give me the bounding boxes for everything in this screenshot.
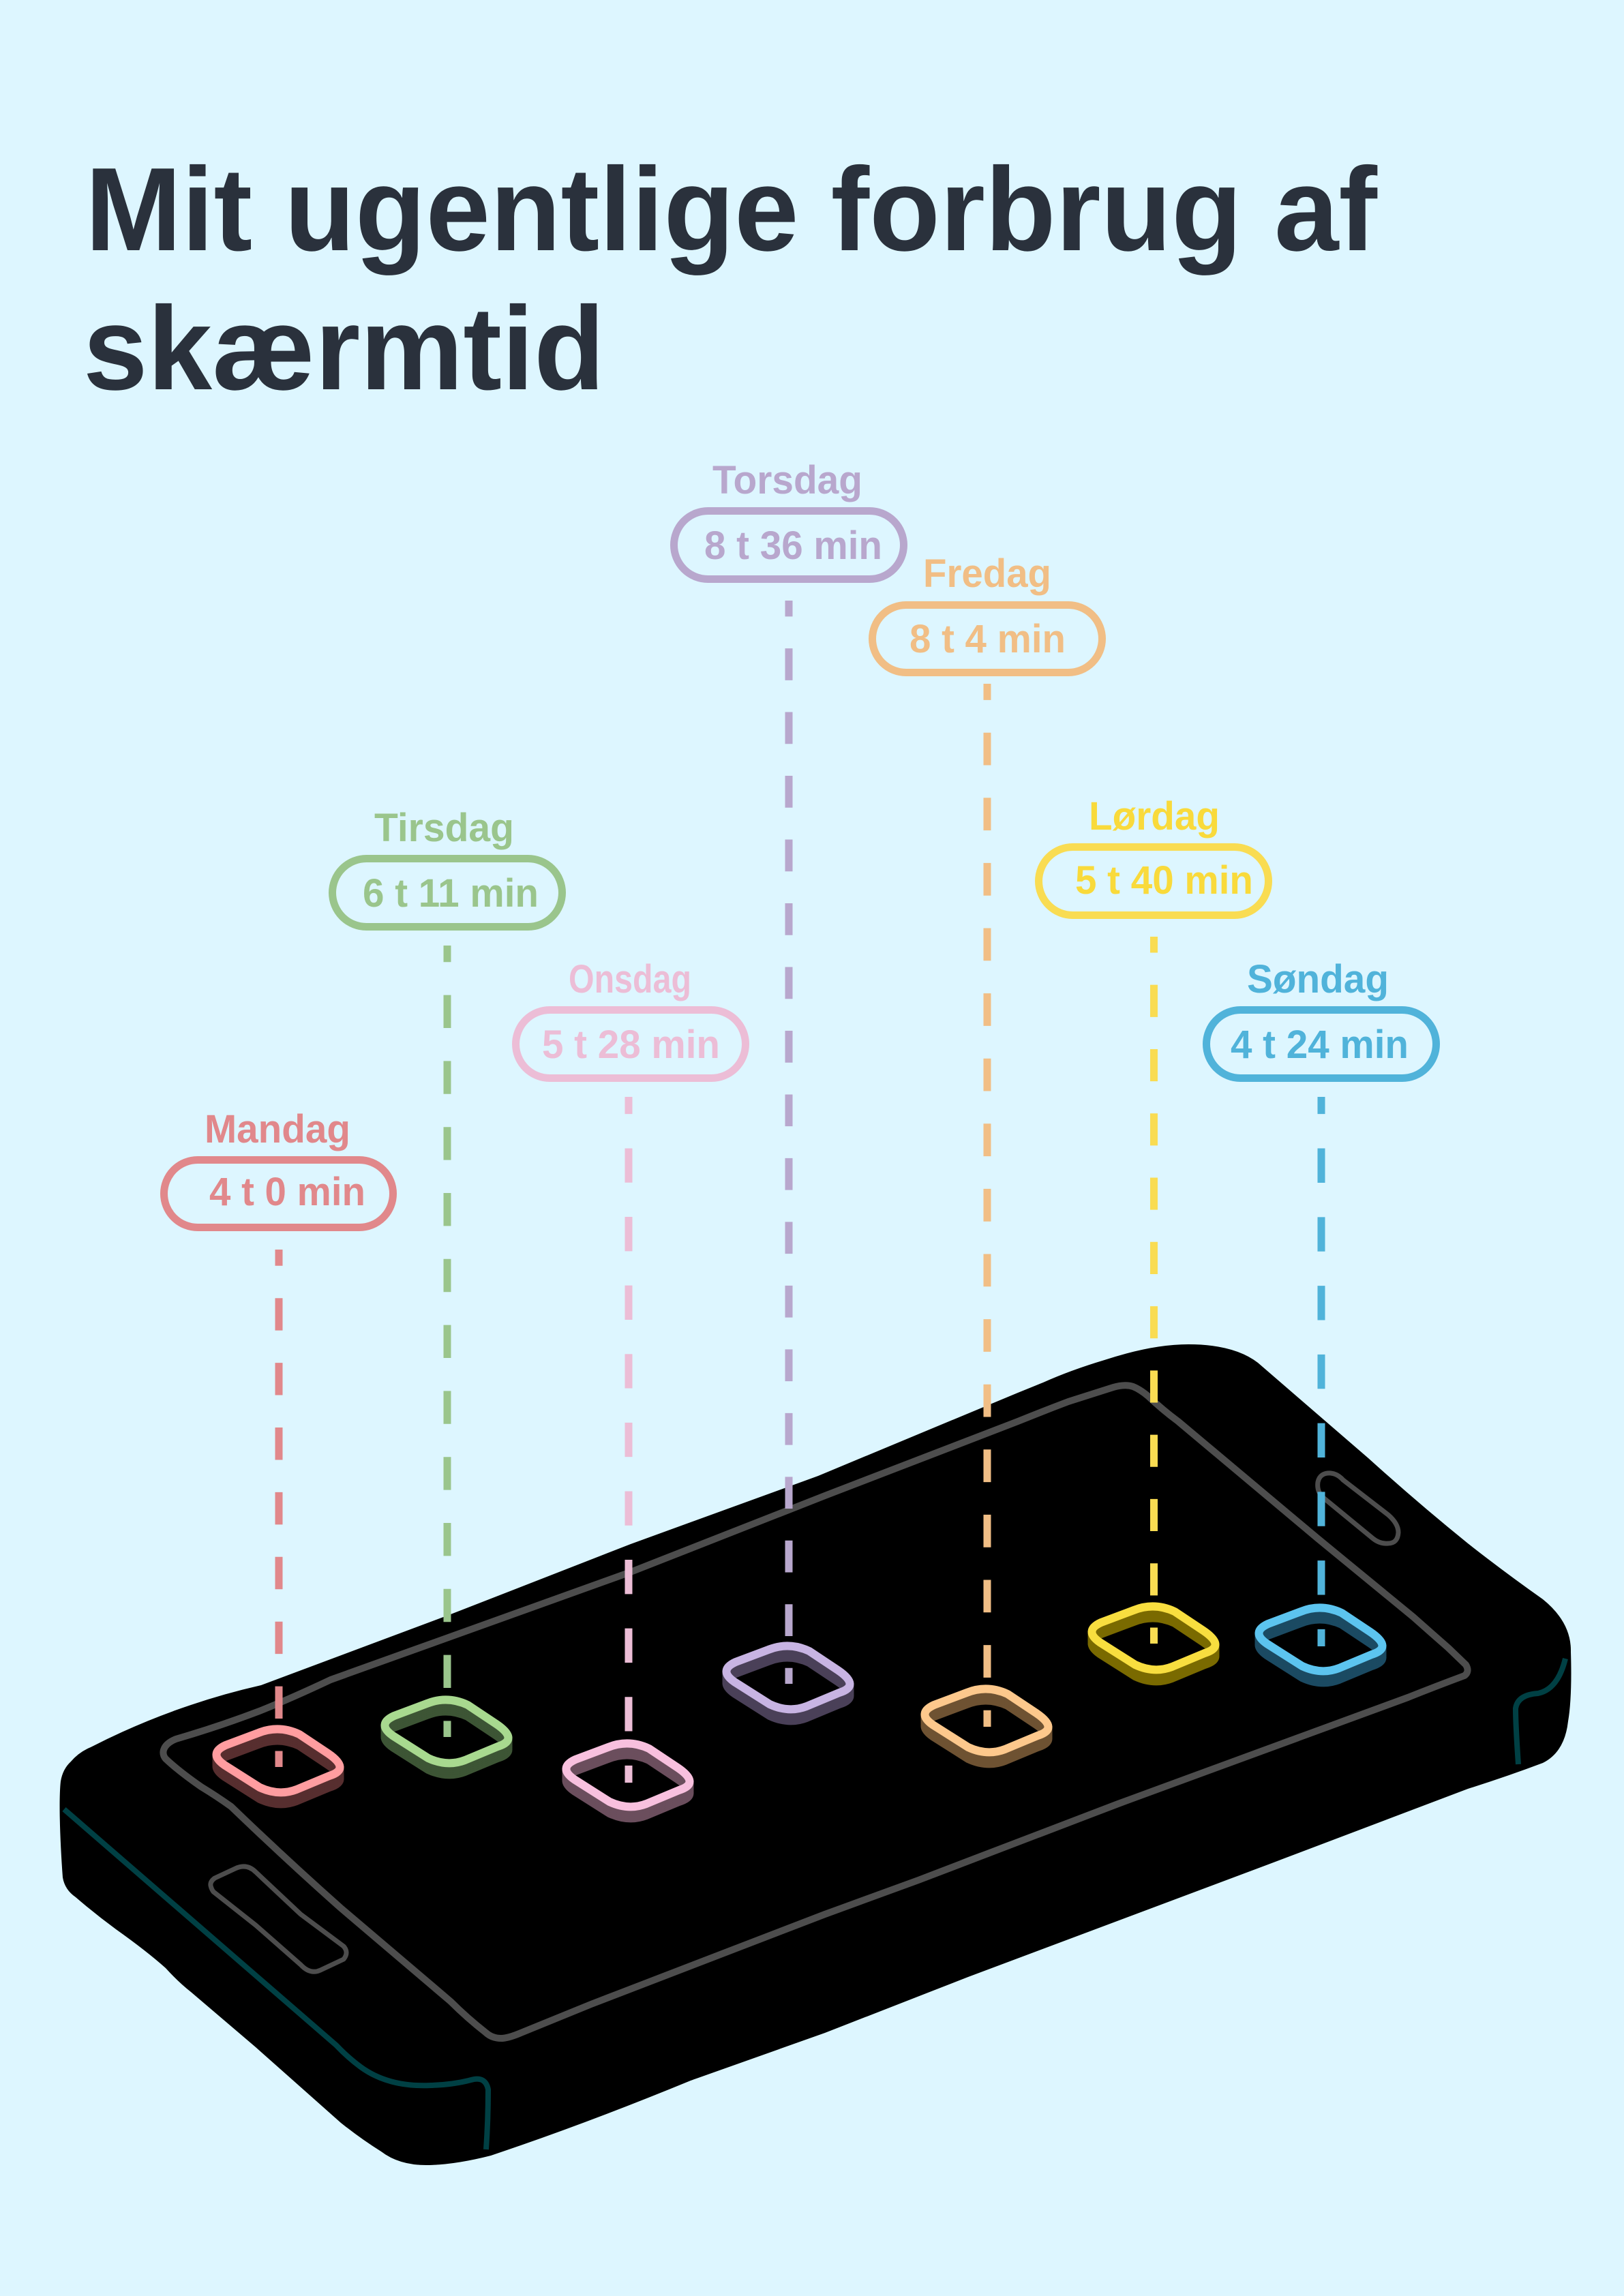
- label: Mandag: 4 t 0 min: [209, 1170, 365, 1214]
- label: Søndag: Søndag: [1247, 957, 1389, 1001]
- label: Onsdag: [515, 957, 746, 1078]
- label: Mandag: Mandag: [205, 1107, 350, 1151]
- ring: Onsdag: [566, 1743, 690, 1818]
- ring: Lørdag: [1092, 1606, 1216, 1681]
- ring: Tirsdag: [385, 1700, 509, 1774]
- label: Søndag: [1207, 957, 1436, 1078]
- dashed line: Lørdag: [1150, 937, 1158, 1644]
- dashed line: Onsdag: [625, 1097, 633, 1783]
- label: Fredag: Fredag: [923, 552, 1051, 596]
- title: [83, 142, 1378, 414]
- dashed line: Søndag: [1317, 1097, 1325, 1646]
- ring: Torsdag: [726, 1646, 850, 1721]
- ring: Mandag: [216, 1729, 340, 1804]
- label: Torsdag: 8 t 36 min: [704, 524, 882, 568]
- label: Søndag: 4 t 24 min: [1231, 1023, 1409, 1067]
- teal edge line, right: [1516, 1659, 1565, 1764]
- ring: Fredag: [924, 1689, 1049, 1764]
- label: Mandag: [164, 1107, 393, 1227]
- label: Tirsdag: 6 t 11 min: [363, 871, 539, 916]
- label: Onsdag: 5 t 28 min: [542, 1023, 720, 1067]
- dashed line: Torsdag: [785, 601, 792, 1684]
- label: Torsdag: Torsdag: [712, 458, 862, 502]
- ring: Søndag: [1259, 1607, 1383, 1682]
- label: Fredag: [873, 552, 1102, 672]
- dashed line: Tirsdag: [443, 946, 451, 1737]
- dashed line: Fredag: [983, 684, 991, 1727]
- label: Lørdag: [1039, 794, 1268, 915]
- speaker slot, right: [1318, 1473, 1398, 1543]
- label: Tirsdag: [333, 806, 562, 927]
- label: Fredag: 8 t 4 min: [909, 617, 1066, 661]
- label: Onsdag: Onsdag: [569, 957, 691, 1001]
- dashed line: Mandag: [275, 1250, 282, 1767]
- teal edge line, left: [64, 1809, 488, 2149]
- phone screen outline: [163, 1385, 1468, 2038]
- title: Mit ugentlige forbrug af: [85, 142, 1378, 275]
- label: Torsdag: [674, 458, 904, 579]
- phone body: [60, 1344, 1571, 2165]
- speaker slot, left: [211, 1867, 346, 1972]
- label: Lørdag: Lørdag: [1089, 794, 1220, 839]
- title: skærmtid: [83, 282, 605, 414]
- phone illustration: [60, 1344, 1571, 2165]
- label: Lørdag: 5 t 40 min: [1075, 858, 1253, 903]
- label: Tirsdag: Tirsdag: [374, 806, 514, 850]
